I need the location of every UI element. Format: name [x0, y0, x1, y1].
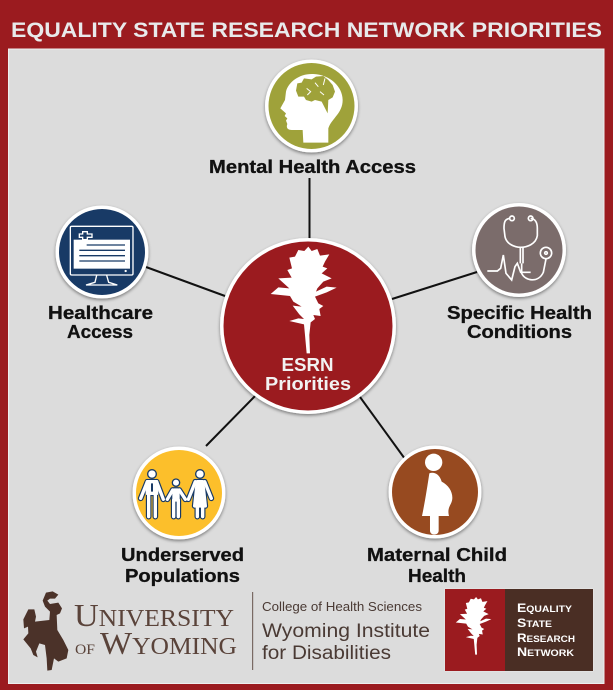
- icon: paintbrush flower: [271, 247, 337, 353]
- label: underserved populations: Underserved: [121, 544, 244, 565]
- node: specific health conditions: [472, 203, 566, 297]
- logo: University of Wyoming: OF: [75, 642, 95, 658]
- icon: family of three: [141, 470, 211, 517]
- logo wordmark: RESEARCH: [517, 631, 575, 645]
- label: specific health conditions: Specific Health: [447, 302, 592, 323]
- node: mental health access: [265, 60, 358, 152]
- center label: ESRN: [282, 354, 334, 375]
- label: healthcare access: [48, 302, 153, 342]
- icon: stethoscope with pulse: [487, 216, 552, 280]
- label: healthcare access: Healthcare: [48, 302, 153, 323]
- text block: college and institute: Wyoming Institute: [262, 621, 430, 642]
- text block: college and institute: College of Health Sciences: [262, 599, 423, 614]
- icon: bucking horse and rider: [23, 591, 68, 671]
- node: underserved populations: [132, 446, 226, 540]
- icon: computer monitor: [70, 226, 133, 285]
- logo: University of Wyoming: [23, 591, 237, 671]
- logo wordmark: EQUALITY: [517, 601, 572, 615]
- center label: Priorities: [265, 373, 351, 394]
- logo: University of Wyoming: UNIVERSITY: [74, 597, 234, 633]
- text block: college and institute: for Disabilities: [262, 643, 391, 664]
- node: maternal child health: [388, 446, 482, 538]
- label: maternal child health: Maternal Child: [367, 544, 507, 565]
- label: maternal child health: [367, 544, 507, 586]
- label: mental health access: Mental Health Access: [209, 156, 416, 177]
- icon: small flower: [456, 597, 491, 655]
- text block: college and institute: [262, 599, 430, 664]
- label: underserved populations: [121, 544, 244, 586]
- label: specific health conditions: Conditions: [467, 321, 572, 342]
- logo: University of Wyoming: WYOMING: [100, 625, 237, 661]
- logo: Equality State Research Network: [444, 588, 594, 672]
- connector lines: [146, 178, 477, 459]
- logo wordmark: STATE: [517, 616, 552, 630]
- label: maternal child health: Health: [408, 565, 466, 586]
- divider: [252, 592, 253, 670]
- title: EQUALITY STATE RESEARCH NETWORK PRIORITIES: [11, 19, 602, 42]
- node: healthcare access: [56, 206, 148, 298]
- center node: ESRN priorities: [220, 238, 396, 414]
- logo wordmark: NETWORK: [517, 645, 575, 659]
- center label: [265, 354, 351, 394]
- label: healthcare access: Access: [67, 321, 133, 342]
- logo wordmark: [517, 601, 575, 659]
- icon: head with brain: [280, 74, 343, 143]
- label: underserved populations: Populations: [125, 565, 240, 586]
- label: specific health conditions: [447, 302, 592, 342]
- icon: pregnant woman: [422, 454, 452, 535]
